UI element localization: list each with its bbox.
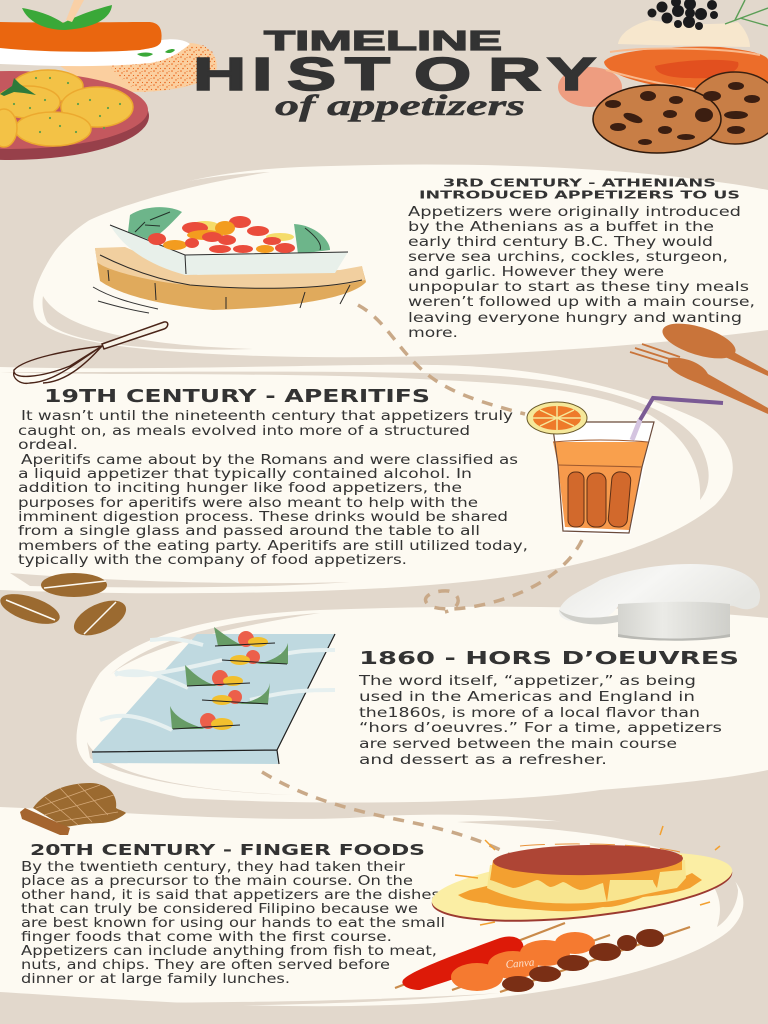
text block: 20th century: place as a precursor to the main course. On the: [21, 874, 413, 889]
text block: 3rd century: serve sea urchins, cockles, sturgeon,: [408, 250, 728, 265]
title line: timeline: TIMELINE: [264, 25, 502, 56]
text block: 1860: the1860s, is more of a local flavor than: [359, 706, 700, 721]
text block: 3rd century: Appetizers were originally introduced: [408, 205, 741, 220]
heading: 3rd century: [419, 176, 740, 202]
text block: 20th century: that can truly be considered Filipino because we: [21, 902, 418, 917]
text block: 19th century: members of the eating party. Aperitifs are still utilized today,: [18, 539, 528, 554]
spoon 5: [170, 706, 240, 730]
text block: 3rd century: [408, 205, 755, 341]
text block: 19th century: imminent digestion process. These drinks would be shared: [18, 510, 508, 525]
text block: 19th century: typically with the company of food appetizers.: [18, 553, 407, 568]
text block: 1860: [358, 674, 722, 768]
panel: 19th century background: [0, 365, 733, 593]
text block: 3rd century: by the Athenians as a buffet in the: [408, 220, 714, 235]
heading: 19th century: 19TH CENTURY - APERITIFS: [44, 386, 430, 407]
text block: 1860: and dessert as a refresher.: [359, 753, 607, 768]
icon: chocolate chip cookies: [593, 72, 768, 153]
heading: 1860: 1860 - HORS D’OEUVRES: [359, 648, 739, 669]
title line: history: HISTORY: [193, 49, 596, 100]
icon: toast appetizer: [0, 0, 217, 92]
text block: 3rd century: leaving everyone hungry and wanting: [408, 311, 742, 326]
icon: platter of spoons: [92, 627, 335, 764]
heading: 3rd century: INTRODUCED APPETIZERS TO US: [419, 188, 740, 202]
text block: 19th century: [18, 409, 528, 568]
icon: potato plate: [0, 70, 149, 160]
heading: 3rd century: 3RD CENTURY - ATHENIANS: [443, 176, 716, 190]
text block: 19th century: ordeal.: [18, 438, 78, 453]
icon: spoon and fork: [630, 317, 768, 414]
title: [193, 25, 596, 122]
icon: whisk: [14, 322, 168, 383]
icon: leche flan: [429, 826, 735, 934]
text block: 20th century: dinner or at large family lunches.: [21, 972, 290, 987]
text block: 20th century: By the twentieth century, they had taken their: [21, 860, 406, 875]
icon: juice glass: [527, 398, 723, 535]
dashed timeline path: [262, 305, 582, 856]
spoon 4: [202, 683, 270, 705]
icon: salad on wooden board: [93, 207, 366, 313]
text block: 20th century: Appetizers can include anything from fish to meat,: [21, 944, 437, 959]
text block: 3rd century: unpopular to start as these tiny meals: [408, 280, 749, 295]
text block: 19th century: It wasn’t until the nineteenth century that appetizers truly: [21, 409, 513, 424]
text block: 1860: are served between the main course: [359, 737, 677, 752]
spoon 2: [222, 643, 288, 665]
text block: 3rd century: weren’t followed up with a main course,: [408, 295, 755, 310]
title line: of appetizers: of appetizers: [275, 89, 525, 122]
icon: coffee beans: [0, 573, 131, 643]
icon: barbecue skewers: [395, 923, 690, 992]
heading: 20th century: 20TH CENTURY - FINGER FOODS: [30, 841, 425, 859]
icon: salmon and caviar canape: [558, 0, 768, 107]
text block: 20th century: are best known for using our hands to eat the small: [21, 916, 445, 931]
icon: oven mitt: [20, 783, 126, 835]
icon: barbecue skewers: Canva: [505, 956, 535, 971]
text block: 19th century: caught on, as meals evolved into more of a structured: [18, 424, 470, 439]
icon: chef hat: [559, 564, 760, 641]
panel: 1860 background: [77, 607, 768, 803]
spoon 1: [214, 627, 275, 647]
text block: 1860: “hors d’oeuvres.” For a time, appetizers: [359, 721, 722, 736]
spoon 3: [185, 665, 250, 686]
text block: 1860: used in the Americas and England in: [359, 690, 695, 705]
text block: 20th century: other hand, it is said that appetizers are the dishes: [21, 888, 440, 903]
text block: 19th century: from a single glass and passed around the table to all: [18, 524, 480, 539]
text block: 19th century: Aperitifs came about by the Romans and were classified as: [21, 453, 518, 468]
text block: 1860: The word itself, “appetizer,” as being: [358, 674, 696, 689]
panel: 20th century background: [0, 807, 743, 1006]
text block: 3rd century: early third century B.C. They would: [408, 235, 713, 250]
text block: 19th century: addition to inciting hunger like food appetizers, the: [18, 481, 462, 496]
text block: 20th century: finger foods that come with the first course.: [21, 930, 392, 945]
text block: 3rd century: more.: [408, 326, 458, 341]
text block: 20th century: nuts, and chips. They are often served before: [21, 958, 390, 973]
panel: 3rd century background: [33, 165, 768, 357]
text block: 3rd century: and garlic. However they were: [408, 265, 664, 280]
text block: 19th century: purposes for aperitifs were also meant to help with the: [18, 496, 478, 511]
text block: 19th century: a liquid appetizer that typically contained alcohol. In: [18, 467, 472, 482]
text block: 20th century: [21, 860, 445, 987]
